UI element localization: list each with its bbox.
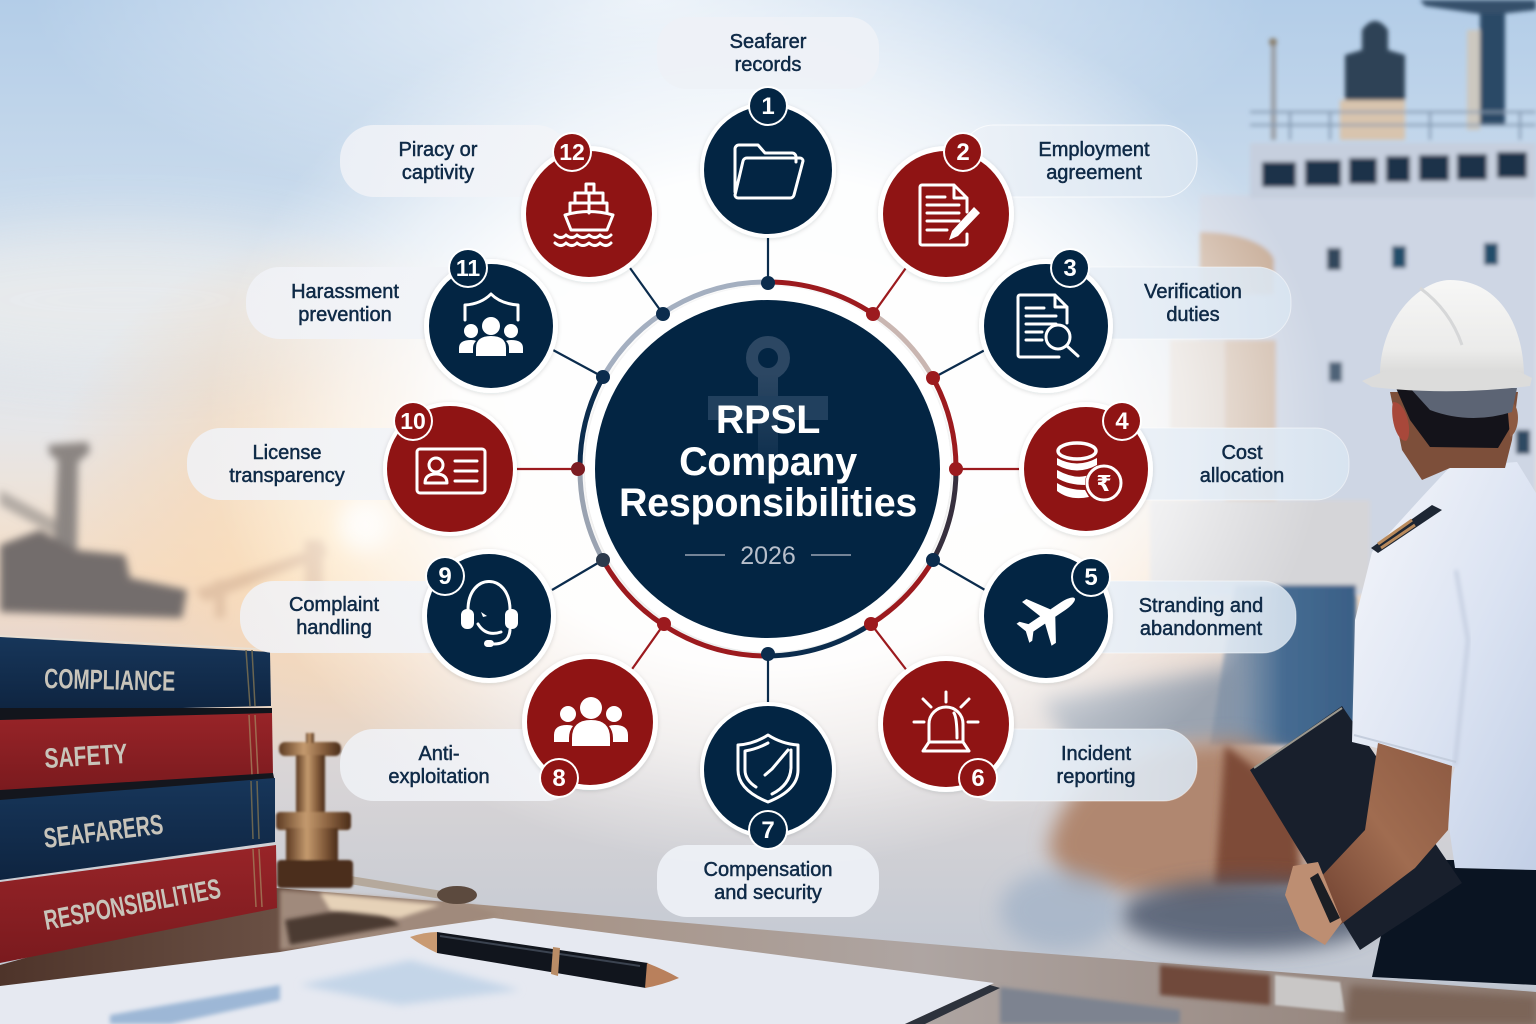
label pill: Piracy or [399,139,478,161]
paper chart on table [0,918,1000,1024]
label pill [657,17,879,89]
badge 4 [1102,401,1142,441]
badge 2: 2 [956,139,970,166]
item 2: employment agreement [878,125,1197,282]
label pill: Seafarer [730,31,807,53]
book stack [0,636,277,963]
item 1: seafarer records [657,17,879,238]
icon: airplane [1008,576,1089,655]
deck table [0,880,1536,1024]
label pill: handling [296,617,372,639]
item 6: incident reporting [878,656,1197,801]
label pill: Harassment [291,281,399,303]
icon: document with magnifier [1018,295,1078,357]
label pill: Complaint [289,594,379,616]
book: compliance [0,636,271,712]
book: responsibilities [0,845,277,963]
label pill: prevention [298,304,392,326]
item 9: complaint handling [240,549,556,683]
item 12: piracy or captivity [340,125,657,282]
label pill: Verification [1144,281,1242,303]
label pill: agreement [1046,162,1142,184]
badge 2 [943,132,983,172]
segmented ring [580,282,956,656]
epaulette [1371,505,1442,553]
label pill [960,125,1197,197]
icon: group of people [554,697,628,746]
label pill: Incident [1061,743,1131,765]
badge 12 [552,132,592,172]
label pill: and security [714,882,822,904]
label pill [340,729,580,801]
book: safety: SAFETY [43,738,128,774]
badge 11: 11 [456,255,480,281]
book: safety [0,713,273,792]
item 5: stranding and abandonment [979,549,1296,683]
label pill [187,428,430,500]
badge 7: 7 [761,817,775,844]
title: Responsibilities [619,481,917,525]
label pill: allocation [1200,465,1284,487]
label pill [960,729,1197,801]
clipboard [1250,706,1462,950]
hard hat [1362,280,1532,391]
pen [410,932,679,988]
label pill [1060,581,1296,653]
item 3: verification duties [979,248,1291,393]
icon: headset [461,582,518,647]
officer with hard hat and clipboard [1250,280,1536,985]
badge 6: 6 [971,765,985,792]
label pill: abandonment [1140,618,1263,640]
label pill [1110,428,1349,500]
label pill [246,267,480,339]
label pill: Stranding and [1139,595,1263,617]
book: responsibilities: RESPONSIBILITIES [41,873,223,936]
right-hand ship [1150,0,1536,745]
badge 1 [748,86,788,126]
title: Company [679,440,857,484]
badge 7 [748,810,788,850]
neck and head [1390,392,1518,480]
label pill [240,581,470,653]
label pill: reporting [1057,766,1135,788]
badge 9: 9 [438,563,452,590]
label pill: transparency [229,465,345,487]
distant port with cranes [0,442,327,618]
hand [1285,862,1342,945]
badge 10 [393,401,433,441]
item 10: license transparency [187,401,517,536]
label pill: Anti- [418,743,460,765]
icon: document with pen [920,185,980,245]
anchor watermark [708,342,828,479]
badge 1: 1 [761,93,775,120]
rail [350,880,442,895]
icon: alarm siren [914,692,978,751]
icon: shield with people [459,294,523,356]
badge 5: 5 [1084,564,1098,591]
brass bollard [276,733,353,888]
label pill: duties [1166,304,1220,326]
connectors [515,235,1020,706]
label pill: Compensation [704,859,832,881]
navy disc [595,300,940,638]
item 7: compensation and security [657,702,879,917]
label pill: exploitation [388,766,490,788]
item 11: harassment prevention [246,248,558,393]
badge 6 [958,758,998,798]
badge 8 [539,758,579,798]
shirt [1352,462,1536,870]
book: seafarers: SEAFARERS [42,809,165,854]
badge 11 [448,248,488,288]
trousers [1372,860,1536,985]
forearm [1318,743,1452,925]
badge 3 [1050,248,1090,288]
label pill [340,125,570,197]
badge 4: 4 [1115,408,1129,435]
watch [1310,873,1340,923]
badge 9 [425,556,465,596]
icon: shield with check [738,735,798,802]
book: compliance: COMPLIANCE [44,663,175,697]
item 8: anti-exploitation [340,654,658,801]
label pill [1060,267,1291,339]
white disc [585,286,951,652]
icon: ship on waves [555,184,613,246]
badge 3: 3 [1063,255,1077,282]
label pill: Cost [1221,442,1263,464]
book: seafarers [0,778,275,880]
icon: coins with rupee: ₹ [1096,472,1112,497]
icon: coins with rupee [1057,443,1123,502]
title: RPSL [716,398,820,442]
icon: folder [735,145,803,198]
icon: ID card [417,449,485,493]
label pill: Employment [1038,139,1150,161]
label pill [657,845,879,917]
label pill: records [735,54,801,76]
year: 2026 [740,542,796,570]
label pill: captivity [402,162,474,184]
badge 12: 12 [559,139,585,165]
badge 10: 10 [400,408,426,434]
item 4: cost allocation [1019,401,1349,536]
central hub [580,282,956,656]
badge 8: 8 [552,765,566,792]
badge 5 [1071,557,1111,597]
label pill: License [253,442,321,464]
